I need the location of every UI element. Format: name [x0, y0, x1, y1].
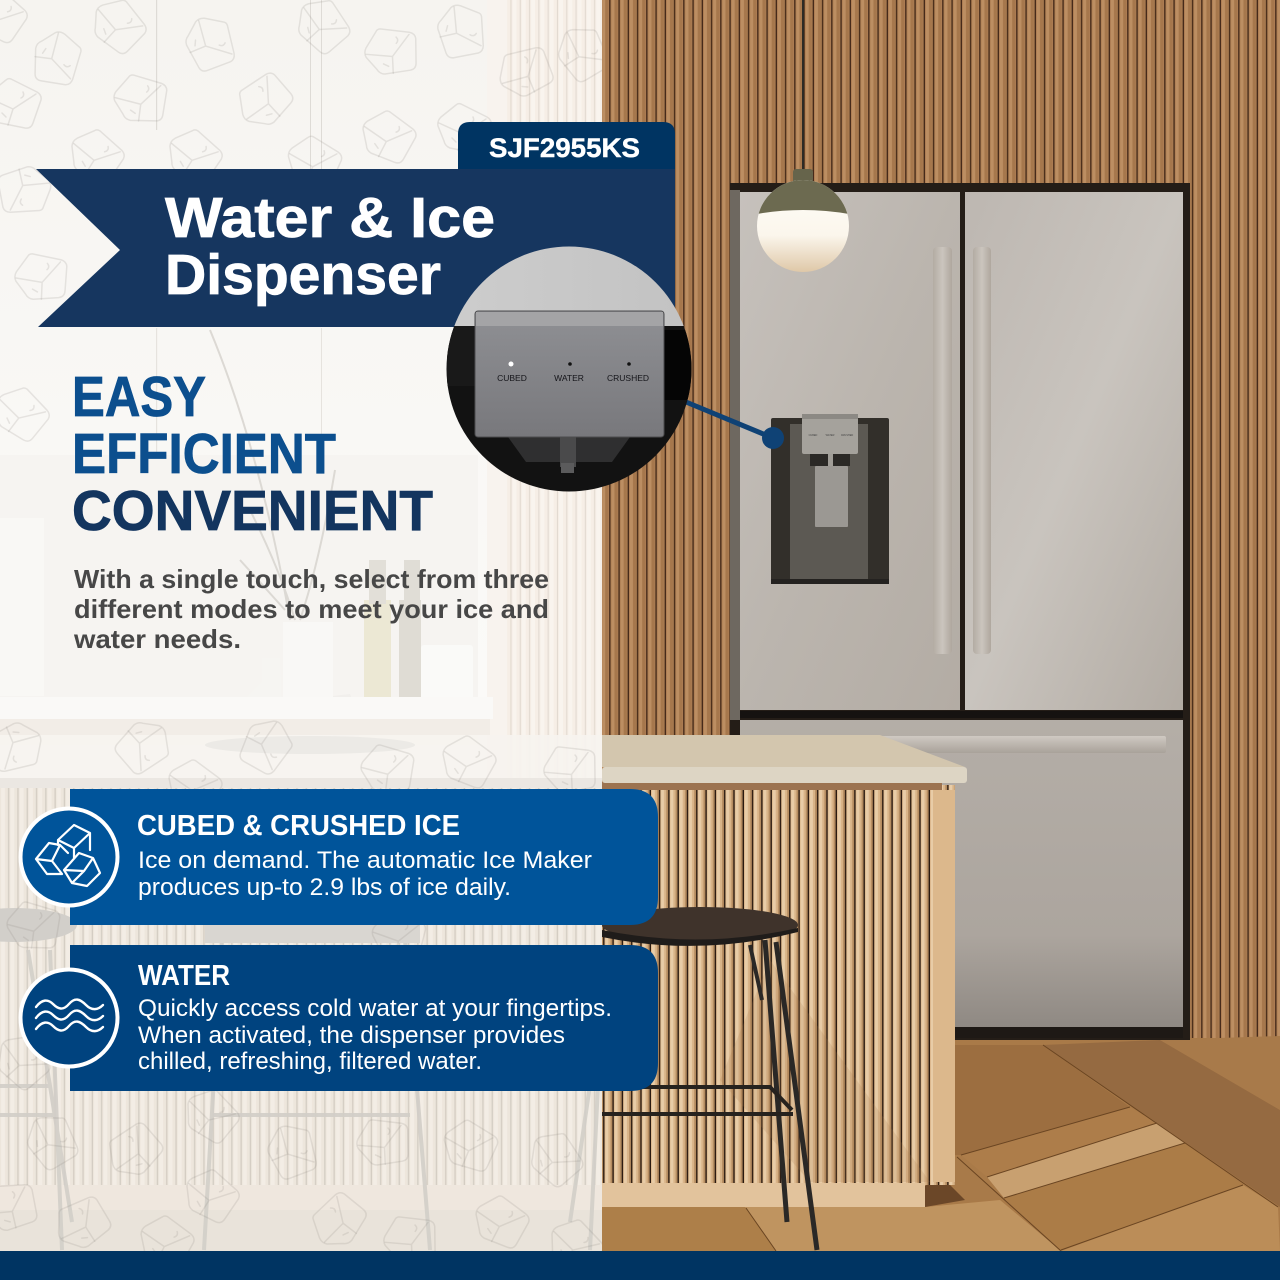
pendant lamp	[757, 0, 849, 272]
ghost: utensil cup	[421, 645, 473, 700]
ghost: vases	[244, 622, 360, 744]
refrigerator	[730, 183, 1190, 1040]
panel: water: chilled, refreshing, filtered water.	[138, 1048, 482, 1075]
title banner: Water & Ice	[165, 186, 495, 250]
headline: EFFICIENT	[72, 422, 336, 486]
intro paragraph	[73, 564, 549, 654]
drawer handle	[880, 736, 1166, 753]
panel: cubed and crushed ice	[70, 789, 658, 925]
ghost: island top	[510, 735, 596, 778]
ghost: picture frame	[0, 518, 44, 696]
ice cube pattern	[0, 0, 620, 1278]
dispenser on fridge: CRUSHED	[841, 434, 853, 437]
ghost: counter shelf	[333, 697, 493, 719]
title banner: Dispenser	[165, 243, 441, 307]
panel: cubed and crushed ice: produces up-to 2.9 lbs of ice daily.	[138, 874, 511, 901]
headline: CONVENIENT	[72, 479, 433, 543]
ghost: slatted island	[0, 788, 602, 1185]
right door	[965, 192, 1183, 710]
model number tab	[458, 122, 675, 170]
bottom freezer drawer	[740, 720, 1183, 1027]
right door handle	[973, 247, 991, 654]
panel: water: When activated, the dispenser provides	[138, 1022, 565, 1049]
panel: water: Quickly access cold water at your fingertips.	[138, 995, 612, 1022]
refrigerator alcove shadow	[730, 183, 1190, 1040]
icon: ice cubes	[20, 808, 118, 906]
dispenser close-up circle: WATER	[554, 373, 584, 383]
right scene: slatted wall	[600, 0, 1280, 1045]
dispenser on fridge: CUBED	[809, 434, 818, 437]
panel: water: WATER	[138, 960, 230, 992]
headline: EASY	[72, 365, 206, 429]
model number tab: SJF2955KS	[489, 133, 640, 163]
dispenser on fridge	[771, 414, 889, 584]
connector line to dispenser	[686, 402, 784, 449]
left door	[740, 192, 960, 710]
icon: water waves	[20, 970, 118, 1066]
island cabinet	[602, 782, 955, 1207]
dispenser close-up circle: CUBED	[497, 373, 527, 383]
left translucent scene panel	[0, 0, 620, 1278]
freezer shadow	[955, 1027, 1183, 1038]
ghost: branches	[210, 330, 335, 620]
dispenser close-up circle	[440, 240, 700, 496]
island countertop	[602, 735, 967, 783]
left door handle	[933, 247, 952, 654]
door hinge gap	[740, 711, 1183, 718]
panel: cubed and crushed ice: Ice on demand. The automatic Ice Maker	[138, 847, 592, 874]
dispenser on fridge: WATER	[826, 434, 835, 437]
footer bar	[0, 1251, 1280, 1280]
intro paragraph: With a single touch, select from three	[74, 564, 549, 594]
intro paragraph: different modes to meet your ice and	[74, 594, 549, 624]
ghost: stools	[0, 940, 598, 1250]
panel: water	[70, 945, 658, 1091]
panel: cubed and crushed ice: CUBED & CRUSHED ICE	[137, 810, 460, 842]
right scene: wood floor	[600, 1036, 1280, 1252]
ghost: bottles	[364, 560, 421, 698]
headline	[72, 365, 433, 543]
dispenser close-up circle: CRUSHED	[607, 373, 649, 383]
bar stool	[602, 907, 817, 1250]
title banner	[36, 169, 675, 327]
intro paragraph: water needs.	[73, 624, 241, 654]
